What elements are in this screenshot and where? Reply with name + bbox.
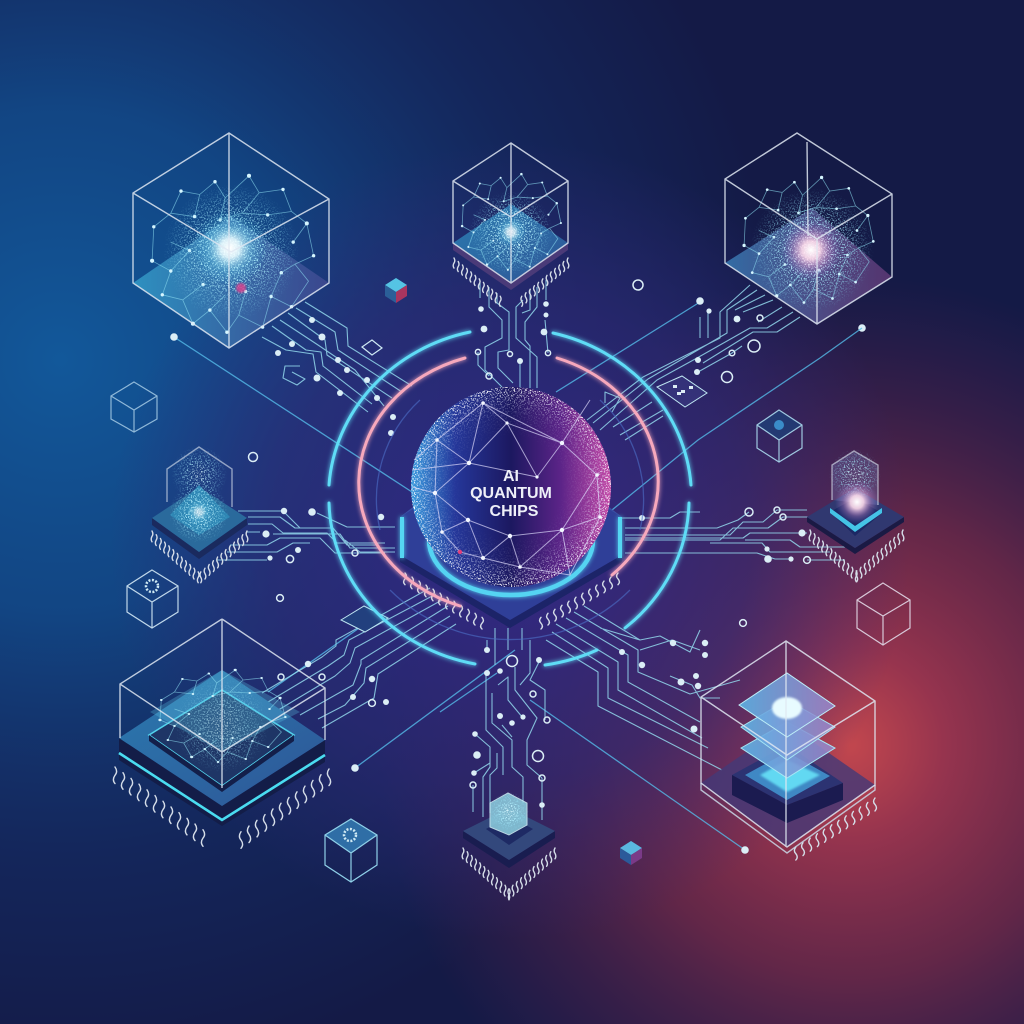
solid mini cube top: [385, 278, 407, 303]
circuit traces: bottom-left bundle: [262, 588, 456, 728]
sphere label: AI: [503, 468, 519, 485]
faint inner rings: [376, 400, 644, 640]
sphere speckle: [411, 387, 611, 587]
chip: bottom-center with glowing cube: [462, 792, 556, 900]
circuit traces: left bundle: [217, 452, 395, 601]
pink ring: [359, 358, 658, 606]
sphere label line 2: QUANTUM: [470, 485, 552, 502]
small wire cube right: [857, 583, 910, 645]
circuit traces: bottom-right bundle: [546, 606, 740, 770]
chip: bottom-left large with network: [113, 619, 331, 848]
small cube bottom left: [325, 819, 377, 882]
sphere nodes: [433, 401, 602, 569]
sphere label line 3: CHIPS: [490, 503, 539, 520]
chip: right-middle with glowing core: [807, 449, 904, 582]
circuit traces: bottom bundle: [470, 628, 550, 820]
circuit traces: top-left bundle: [262, 302, 412, 436]
cube: top-center network on chip: [453, 143, 569, 306]
central processor chip: [376, 400, 644, 640]
small cube with icon: [127, 570, 178, 628]
cube: top-left network: [133, 133, 329, 348]
cube: bottom-right stacked layers: [701, 641, 876, 860]
outer cyan ring: [329, 332, 691, 665]
small wire cube: [111, 382, 157, 432]
sphere: quantum globe: [411, 387, 611, 587]
cube: top-right network: [725, 133, 892, 324]
circuit traces: right bundle: [616, 507, 845, 626]
long connector lines: [170, 297, 866, 854]
solid mini cube bottom: [620, 841, 642, 865]
chip: left-middle with particle cube: [151, 446, 248, 583]
sphere mesh: [412, 400, 600, 575]
circuit traces: top bundle: [475, 280, 551, 388]
circuit traces: top-right bundle: [587, 280, 800, 440]
layers: [739, 673, 835, 778]
small cube center right: [757, 410, 802, 462]
